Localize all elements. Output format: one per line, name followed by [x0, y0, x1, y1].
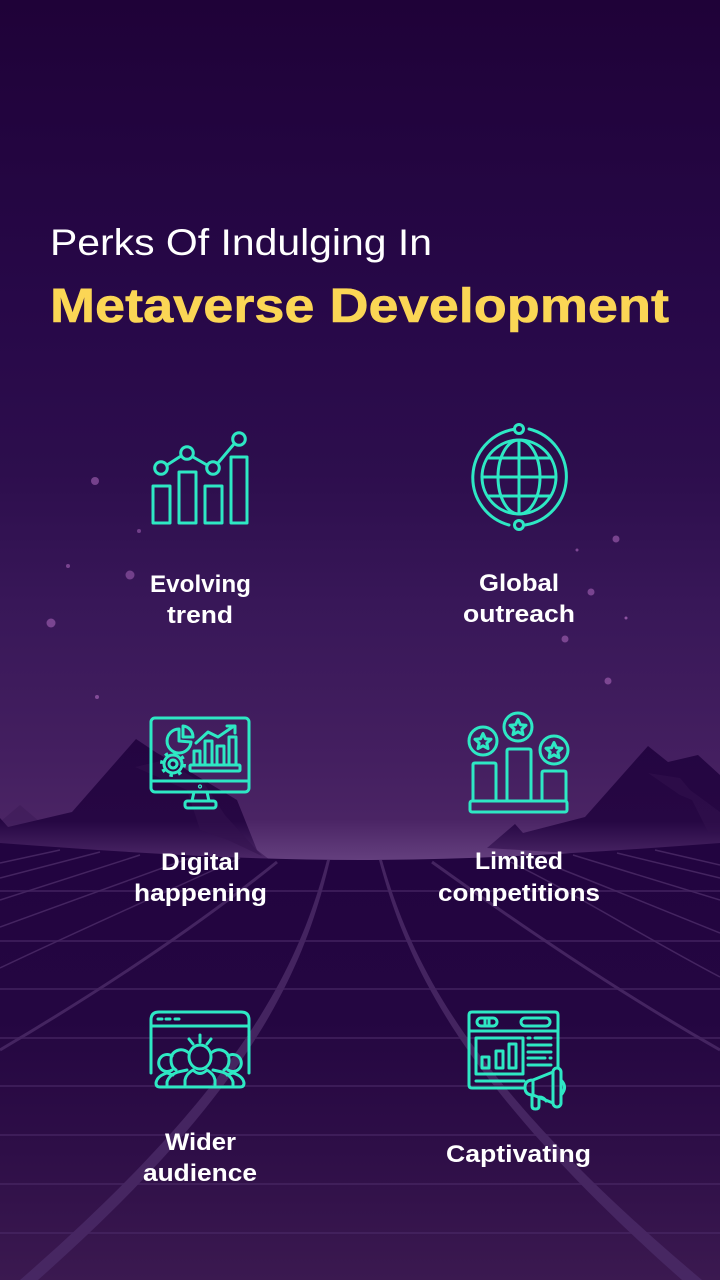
- label: [143, 1129, 257, 1187]
- item: limited competitions: [438, 713, 600, 907]
- icon: browser with audience: [151, 1012, 249, 1087]
- icon: globe with orbit: [473, 424, 566, 530]
- right mountains: [487, 746, 720, 855]
- title line 1: Perks Of Indulging In: [50, 222, 432, 263]
- label: Captivating: [446, 1141, 591, 1168]
- label: Wider: [165, 1129, 236, 1156]
- label: Evolving: [150, 571, 251, 598]
- label: [463, 570, 575, 628]
- label: [150, 571, 251, 629]
- item: evolving trend: [150, 433, 251, 629]
- item: digital happening: [134, 718, 267, 907]
- left mountains: [0, 739, 270, 860]
- title line 2: Metaverse Development: [50, 280, 669, 333]
- label: Digital: [161, 849, 240, 876]
- background stars: [46, 477, 628, 699]
- label: outreach: [463, 601, 575, 628]
- label: trend: [167, 602, 233, 629]
- label: happening: [134, 880, 267, 907]
- item: captivating: [446, 1012, 591, 1168]
- icon: bar chart with trend line: [153, 433, 247, 523]
- label: Limited: [475, 848, 563, 875]
- perspective grid: [0, 850, 720, 1280]
- ground plane: [0, 843, 720, 1280]
- label: audience: [143, 1160, 257, 1187]
- icon: monitor dashboard: [151, 718, 249, 808]
- icon: podium with stars: [469, 713, 568, 812]
- item: wider audience: [143, 1012, 257, 1187]
- item: global outreach: [463, 424, 575, 628]
- icon: browser with megaphone: [469, 1012, 564, 1109]
- label: [134, 849, 267, 907]
- title: [50, 222, 669, 333]
- label: [438, 848, 600, 907]
- label: competitions: [438, 880, 600, 907]
- background sky: [0, 0, 720, 862]
- label: Global: [479, 570, 559, 597]
